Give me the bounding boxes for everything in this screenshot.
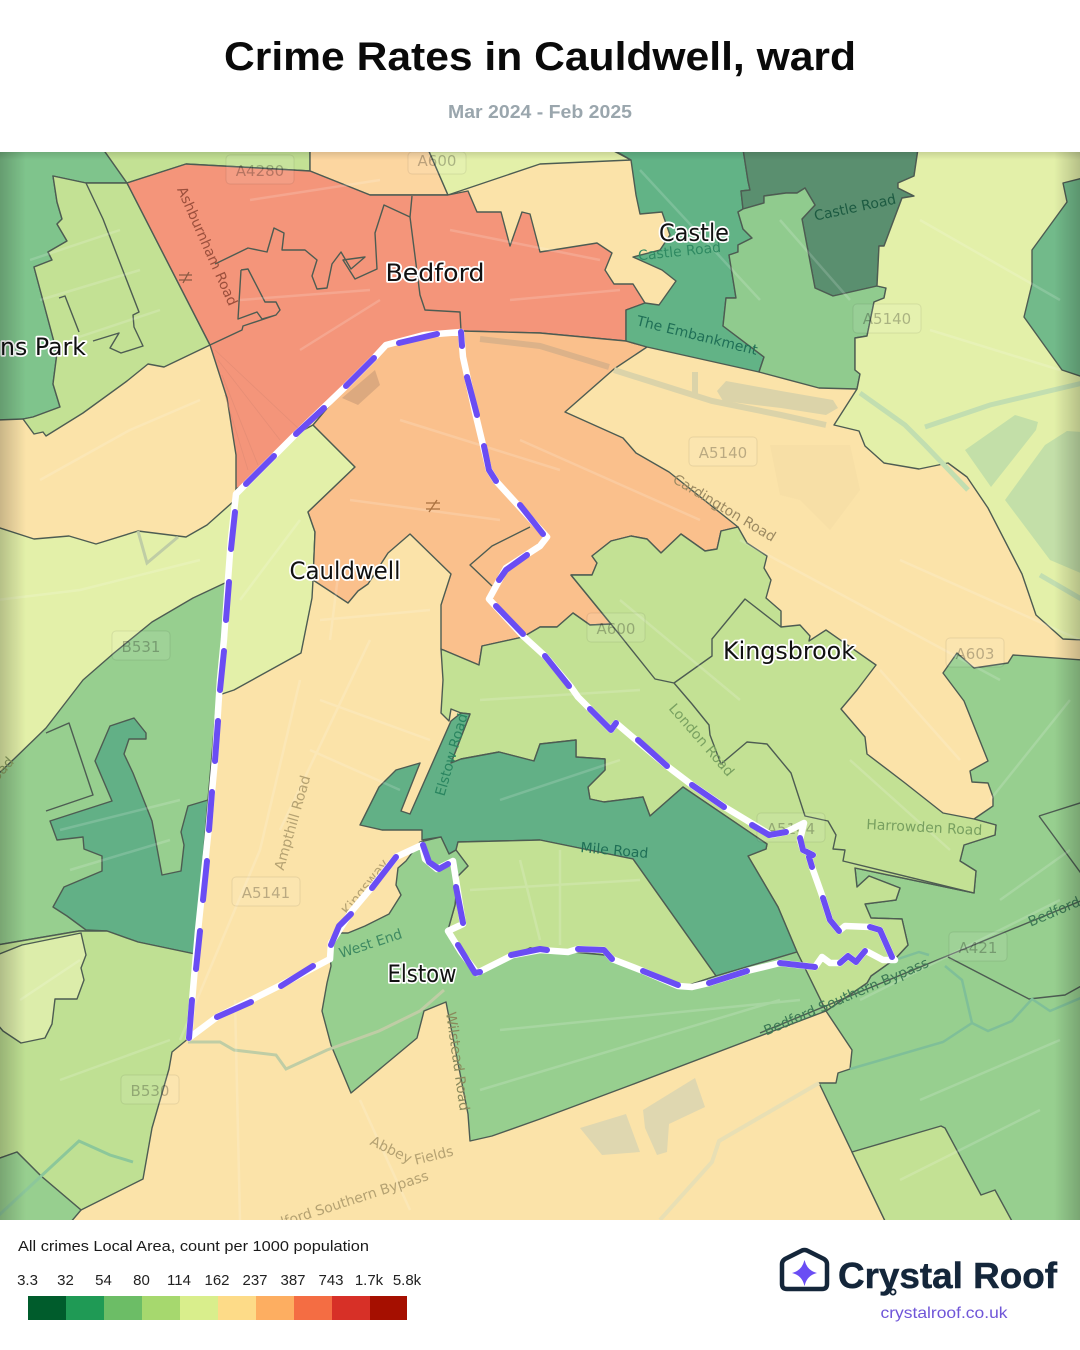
feature: rail line fan — [215, 350, 300, 470]
region: Bedford inner boundaries — [210, 196, 461, 345]
region: Queens Park light green — [23, 176, 210, 436]
feature: south-east stream on tan — [660, 1083, 819, 1220]
feature: south-east streams — [850, 952, 1080, 1069]
legend: scale values: 5.8k — [393, 1272, 422, 1289]
road label: Wilstead Road: Wilstead Road — [442, 1011, 472, 1112]
shield: A5140 east — [853, 304, 921, 333]
region: far east green — [1024, 178, 1080, 377]
shield: A603 — [946, 638, 1004, 667]
legend: scale values: 387 — [280, 1272, 306, 1289]
ward boundary: Cauldwell dashed outline — [189, 332, 895, 1038]
legend: colour bar — [28, 1296, 407, 1320]
feature: stadium grounds — [770, 445, 860, 530]
shield: A5140 centre — [689, 437, 757, 466]
region: far east grey-tan — [1063, 432, 1080, 529]
shield: A5140 east: A5140 — [863, 310, 911, 328]
region: north light green wedge — [104, 152, 310, 182]
place label: Castle: Castle — [659, 219, 729, 247]
region: north yellow-green — [428, 149, 631, 195]
place label: Bedford: Bedford — [386, 259, 484, 287]
road label: Cardington Road: Cardington Road — [670, 472, 778, 546]
place label: Queens Park clipped: ns Park — [0, 333, 86, 361]
shield: B530 — [121, 1075, 179, 1104]
region: west yellow-green and Cauldwell strip — [0, 425, 355, 800]
title: Crime Rates in Cauldwell, ward — [224, 35, 856, 79]
feature: river channel — [614, 370, 826, 425]
region: south-west mid green — [0, 582, 227, 954]
legend: scale values: 3.3 — [17, 1272, 38, 1289]
icon: station symbol south — [426, 500, 440, 512]
region: south-west sliver outline — [46, 723, 93, 811]
road label: Castle Road east: Castle Road — [813, 192, 898, 225]
feature: parkland east — [965, 415, 1080, 574]
legend: scale values: 32 — [57, 1272, 74, 1289]
region: east boundaries — [760, 802, 1080, 1033]
region: Elstow Road dark green — [360, 713, 797, 976]
shield: A4280: A4280 — [236, 162, 284, 180]
region: south of Mile Road light green — [448, 840, 716, 988]
place label: Cauldwell: Cauldwell — [290, 557, 400, 585]
region: Bedford centre red — [127, 164, 645, 489]
icon: Crystal Roof house logo — [782, 1250, 827, 1289]
shield: B531 — [112, 631, 170, 660]
shield: A5141: A5141 — [242, 884, 290, 902]
region: orange inner boundary — [470, 527, 530, 586]
shield: A4280 — [226, 155, 294, 184]
road label: Ashburnham Road: Ashburnham Road — [173, 184, 240, 308]
road label: London Road: London Road — [665, 701, 737, 780]
feature: west stream — [138, 531, 444, 1069]
road label: Elstow Road: Elstow Road — [433, 712, 472, 798]
shield: B531: B531 — [122, 638, 160, 656]
icon: station symbol north — [179, 272, 192, 283]
shield: A600 north — [408, 152, 466, 174]
shield: A600 south — [587, 613, 645, 642]
feature: river Great Ouse and lakes — [717, 381, 838, 415]
road label: Castle Road west: Castle Road — [637, 240, 722, 264]
map edge vignette — [0, 152, 1080, 1220]
region: Castle green — [612, 149, 764, 372]
region: Elstow mid green — [322, 837, 826, 1141]
region: north orange-tan — [310, 149, 448, 195]
road label: Abbey: Abbey — [367, 1134, 414, 1167]
road label: Kingsway under boundary: Kingsway — [339, 856, 393, 919]
shield: A5144 — [757, 813, 825, 842]
shield: A421: A421 — [959, 939, 997, 957]
road label: Harrowden Road: Harrowden Road — [866, 817, 983, 839]
region: Queens Park inner boundaries — [59, 183, 143, 353]
feature: south-west stream — [0, 1141, 133, 1217]
region: Kingsbrook inner boundaries — [611, 599, 974, 893]
region: Kingsbrook light green — [441, 527, 996, 1011]
region: south-west light green — [0, 931, 195, 1210]
road label: Ampthill Road: Ampthill Road — [272, 774, 314, 872]
legend: scale values: 114 — [167, 1272, 191, 1289]
feature: river east — [860, 383, 1080, 600]
legend: scale values: 54 — [95, 1272, 112, 1289]
shield: B530: B530 — [131, 1082, 169, 1100]
logo wordmark: Crystal Roof — [838, 1255, 1058, 1296]
shield: A5144: A5144 — [767, 820, 815, 838]
legend: scale values: 162 — [204, 1272, 230, 1289]
feature: brown building footprint — [342, 370, 380, 405]
shield: A600 south: A600 — [597, 620, 635, 638]
feature: south lakes — [580, 1078, 705, 1155]
shield: A421 — [949, 932, 1007, 961]
legend heading: All crimes Local Area, count per 1000 population — [18, 1238, 369, 1255]
legend: scale values: 237 — [242, 1272, 268, 1289]
legend: scale values: 743 — [318, 1272, 344, 1289]
subtitle: date range: Mar 2024 - Feb 2025 — [448, 102, 632, 122]
feature: river through orange — [480, 339, 609, 367]
region: south-east light green — [852, 1126, 1013, 1223]
legend: scale values — [17, 1272, 422, 1289]
shield: A600 north: A600 — [418, 152, 456, 170]
region: south-west yellow-green pocket — [0, 933, 86, 1043]
region: far south-west green — [0, 1152, 81, 1223]
region: north-west green — [0, 149, 127, 420]
region: north-east yellow-green — [834, 149, 1080, 640]
road label: Fields: Fields — [413, 1144, 455, 1169]
place label: Kingsbrook: Kingsbrook — [723, 637, 855, 665]
region: south-west darker green — [50, 718, 208, 954]
region: east mid green — [819, 653, 1080, 1223]
shield: A5140 centre: A5140 — [699, 444, 747, 462]
region: Castle Road darkest green — [741, 149, 918, 296]
place label: Elstow: Elstow — [388, 960, 456, 988]
website link: crystalroof.co.uk — [880, 1305, 1009, 1322]
shield: A5141 — [232, 877, 300, 906]
feature: road network — [0, 170, 1080, 1220]
road label: Bedford Southern Bypass south: Bedford Southern Bypass — [257, 1168, 431, 1238]
region: central orange — [308, 331, 738, 665]
legend: scale values: 80 — [133, 1272, 150, 1289]
region: Castle east mid green — [723, 188, 886, 389]
road label: Mile Road: Mile Road — [580, 840, 649, 862]
legend: scale values: 1.7k — [355, 1272, 384, 1289]
shield: A603: A603 — [956, 645, 994, 663]
road label: Bedford Southern Bypass east: Bedford Southern Bypass — [762, 955, 931, 1039]
road label: West End: West End — [337, 926, 404, 962]
road label: The Embankment: The Embankment — [634, 313, 760, 359]
